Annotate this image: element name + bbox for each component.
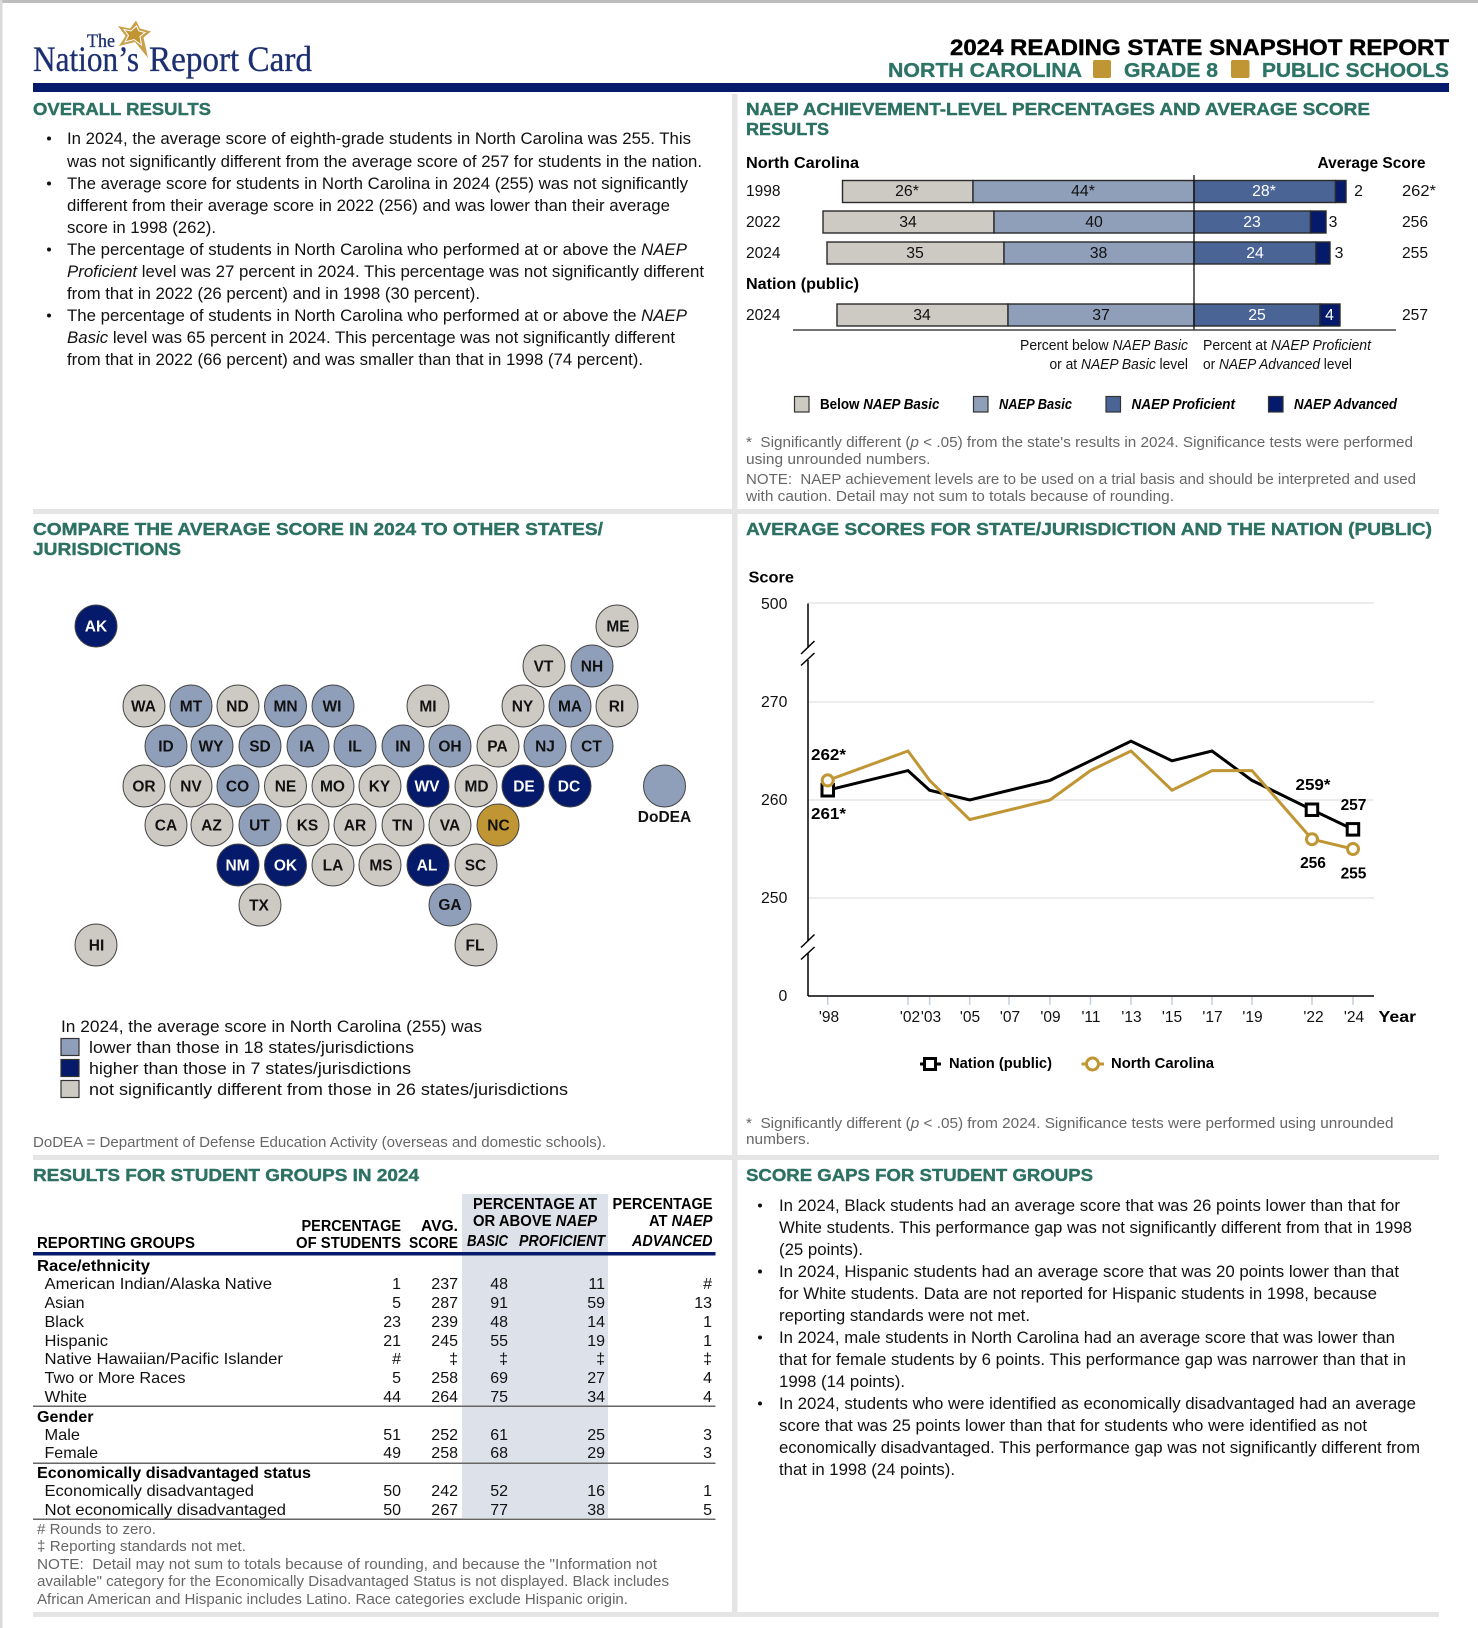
footnotes: student groups: African American and Hispanic includes Latino. Race categories exclude Hispanic origin. — [37, 1592, 628, 1608]
chart: state bubble map: OH — [438, 738, 462, 756]
heading: compare states — [33, 519, 603, 559]
group: gender: Female — [44, 1445, 98, 1462]
text block: overall results bullets: Proficient level was 27 percent in 2024. This percentage was not significantly different — [67, 263, 704, 281]
group: race/ethnicity: 34 — [587, 1389, 605, 1406]
chart: state bubble map: MD — [464, 778, 489, 796]
chart: state bubble map: LA — [323, 858, 343, 874]
text block: score gaps bullets: In 2024, Black students had an average score that was 26 points lower than that for — [779, 1197, 1401, 1215]
text block: score gaps bullets: that in 1998 (24 points). — [779, 1461, 955, 1479]
footnotes: achievement levels: using unrounded numbers. — [746, 452, 930, 468]
group: economically disadvantaged status: Economically disadvantaged — [44, 1483, 254, 1500]
chart: state bubble map: NV — [180, 778, 202, 796]
group: gender: 25 — [587, 1427, 605, 1444]
logo: The Nation's Report Card: The — [87, 31, 115, 52]
legend: achievement levels: NAEP Proficient — [1132, 397, 1236, 413]
text block: overall results bullets: The percentage of students in North Carolina who performed at or above the NAEP — [67, 241, 687, 259]
group: race/ethnicity: 91 — [490, 1295, 508, 1312]
table header: PERCENTAGE AT — [473, 1196, 598, 1213]
text block: overall results bullets: The average score for students in North Carolina in 2024 (255) was not significantly — [67, 175, 689, 193]
logo: The Nation's Report Card — [33, 20, 312, 79]
x axis: '15 — [1162, 1009, 1182, 1026]
group: race/ethnicity — [37, 1258, 712, 1406]
bar: North Carolina 2024: 2024 — [746, 245, 781, 262]
group: race/ethnicity: 48 — [490, 1314, 508, 1331]
chart: state bubble map: UT — [249, 818, 270, 834]
group: gender: 3 — [703, 1445, 712, 1462]
group: gender: Male — [44, 1427, 80, 1444]
data labels: 261* — [811, 806, 847, 823]
footnotes: student groups: ‡ Reporting standards not met. — [37, 1539, 246, 1555]
text block: overall results bullets — [47, 130, 704, 369]
chart: state bubble map: MA — [558, 698, 582, 716]
group: race/ethnicity: 1 — [703, 1333, 712, 1350]
group: race/ethnicity: 1 — [703, 1314, 712, 1331]
bar: North Carolina 1998: 2 — [1354, 183, 1363, 200]
bar: Nation public 2024 — [746, 304, 1428, 326]
y axis: 500 — [761, 596, 788, 613]
chart: state bubble map: DoDEA — [638, 809, 691, 826]
group: race/ethnicity: 14 — [587, 1314, 605, 1331]
chart: stacked achievement-level bars: North Carolina — [746, 155, 859, 172]
x axis: '13 — [1121, 1009, 1142, 1026]
bar: North Carolina 2022 — [746, 211, 1428, 233]
chart: state bubble map: SD — [249, 738, 271, 756]
chart: state bubble map: TN — [392, 818, 413, 834]
report subtitle: state, grade, school type — [888, 59, 1449, 82]
chart: state bubble map: MT — [180, 698, 203, 716]
group: economically disadvantaged status — [37, 1465, 712, 1519]
x axis: '98 — [819, 1009, 839, 1026]
chart: state bubble map: CT — [581, 738, 602, 756]
group: race/ethnicity: 48 — [490, 1276, 508, 1293]
heading: achievement levels: RESULTS — [746, 119, 829, 139]
bar: Nation public 2024: 257 — [1402, 307, 1428, 324]
legend: state comparison: In 2024, the average score in North Carolina (255) was — [61, 1017, 482, 1036]
chart: state bubble map: DC — [558, 778, 580, 796]
group: race/ethnicity: 69 — [490, 1370, 508, 1387]
table header: PERCENTAGE — [612, 1196, 712, 1213]
report subtitle: state, grade, school type: GRADE 8 — [1124, 59, 1218, 82]
footnote: trend significance — [746, 1116, 1394, 1148]
chart: state bubble map: NE — [275, 778, 296, 796]
chart: state bubble map: WI — [323, 698, 341, 716]
x axis: '24 — [1344, 1009, 1364, 1026]
group: race/ethnicity: ‡ — [596, 1351, 605, 1368]
legend: state comparison: higher than those in 7 states/jurisdictions — [89, 1059, 411, 1078]
group: race/ethnicity: 239 — [431, 1314, 458, 1331]
chart: state bubble map: AZ — [201, 818, 222, 834]
group: race/ethnicity: 59 — [587, 1295, 605, 1312]
chart: state bubble map: GA — [438, 897, 462, 914]
y axis: 250 — [761, 890, 788, 907]
table header: PROFICIENT — [519, 1233, 607, 1250]
chart: state bubble map: ME — [606, 618, 630, 636]
group: race/ethnicity: 258 — [431, 1370, 458, 1387]
group: gender: 51 — [383, 1427, 401, 1444]
group: economically disadvantaged status: 38 — [587, 1502, 605, 1519]
x axis: '11 — [1081, 1009, 1101, 1026]
bar: North Carolina 2024: 255 — [1402, 245, 1428, 262]
text block: score gaps bullets: for White students. Data are not reported for Hispanic students in 1998, because — [779, 1285, 1377, 1303]
group: economically disadvantaged status: 77 — [490, 1502, 508, 1519]
bar: North Carolina 1998: 1998 — [746, 183, 781, 200]
footnotes: student groups: NOTE: Detail may not sum to totals because of rounding, and because the "Information not — [37, 1557, 657, 1573]
y axis: 0 — [778, 988, 788, 1005]
heading: compare states: JURISDICTIONS — [33, 539, 181, 559]
footnotes: student groups — [37, 1522, 669, 1608]
chart: stacked achievement-level bars: Average Score — [1318, 155, 1426, 172]
bar: North Carolina 2024: 35 — [906, 245, 924, 262]
chart: state bubble map: CO — [226, 778, 249, 796]
group: economically disadvantaged status: 52 — [490, 1483, 508, 1500]
report title: 2024 READING STATE SNAPSHOT REPORT — [950, 35, 1450, 60]
group: race/ethnicity: Native Hawaiian/Pacific Islander — [44, 1351, 283, 1368]
axis captions: or NAEP Advanced level — [1203, 357, 1352, 373]
chart: state bubble map: MI — [419, 698, 437, 716]
legend: state comparison — [61, 1017, 568, 1099]
panel: achievement-level percentages — [745, 99, 1436, 505]
group: race/ethnicity: 21 — [383, 1333, 401, 1350]
bar: Nation public 2024: 2024 — [746, 307, 781, 324]
chart: state bubble map: HI — [89, 938, 104, 954]
group: race/ethnicity: ‡ — [499, 1351, 508, 1368]
bar: North Carolina 1998: 44* — [1071, 183, 1095, 200]
text block: score gaps bullets: White students. This performance gap was not significantly different from that in 1998 — [779, 1219, 1412, 1237]
table header: BASIC — [467, 1233, 509, 1250]
chart: state bubble map: MS — [369, 858, 393, 874]
bar: North Carolina 2024: 3 — [1335, 245, 1344, 262]
chart: state bubble map: ID — [158, 738, 174, 756]
group: race/ethnicity: 55 — [490, 1333, 508, 1350]
panel: score gaps — [746, 1165, 1420, 1479]
group: race/ethnicity: Black — [44, 1314, 84, 1331]
group: economically disadvantaged status: 5 — [703, 1502, 712, 1519]
report subtitle: state, grade, school type: NORTH CAROLINA — [888, 59, 1082, 82]
group: race/ethnicity: Hispanic — [44, 1333, 108, 1350]
heading: student groups: RESULTS FOR STUDENT GROUPS IN 2024 — [33, 1165, 419, 1185]
chart: stacked achievement-level bars — [746, 155, 1436, 330]
bar: Nation public 2024: 4 — [1325, 307, 1334, 324]
group: race/ethnicity: 23 — [383, 1314, 401, 1331]
group: race/ethnicity: ‡ — [703, 1351, 712, 1368]
x axis: '05 — [960, 1009, 980, 1026]
chart: state bubble map: RI — [609, 698, 624, 716]
chart: state bubble map: WV — [415, 778, 440, 796]
chart: state bubble map: DE — [513, 778, 535, 796]
text block: overall results bullets: In 2024, the average score of eighth-grade students in North Carolina was 255. This — [67, 130, 691, 148]
x axis — [808, 996, 1416, 1026]
axis captions — [1020, 338, 1372, 373]
group: race/ethnicity: Asian — [44, 1295, 84, 1312]
table header: ADVANCED — [631, 1233, 712, 1250]
group: economically disadvantaged status: 242 — [431, 1483, 458, 1500]
chart: stacked achievement-level bars: Nation (public) — [746, 276, 859, 293]
legend: trend lines: Nation (public) — [949, 1056, 1052, 1072]
chart: state bubble map: CA — [155, 818, 177, 834]
legend: achievement levels: NAEP Basic — [999, 397, 1072, 413]
axis captions: Percent at NAEP Proficient — [1203, 338, 1372, 354]
line: Nation (public) — [822, 741, 1359, 835]
group: gender: 258 — [431, 1445, 458, 1462]
group: race/ethnicity: 5 — [392, 1295, 401, 1312]
group: gender: 29 — [587, 1445, 605, 1462]
heading: score gaps: SCORE GAPS FOR STUDENT GROUPS — [746, 1165, 1093, 1185]
data labels: 259* — [1296, 777, 1332, 794]
heading: achievement levels: NAEP ACHIEVEMENT-LEVEL PERCENTAGES AND AVERAGE SCORE — [746, 99, 1370, 119]
bar: North Carolina 2024 — [746, 242, 1428, 264]
data labels: 257 — [1341, 797, 1366, 814]
group: economically disadvantaged status: 267 — [431, 1502, 458, 1519]
chart: state bubble map: FL — [466, 938, 484, 954]
group: race/ethnicity: 44 — [383, 1389, 401, 1406]
group: race/ethnicity: 287 — [431, 1295, 458, 1312]
text block: score gaps bullets — [758, 1197, 1420, 1479]
bar: North Carolina 2022: 40 — [1085, 214, 1103, 231]
group: race/ethnicity: 27 — [587, 1370, 605, 1387]
axis captions: or at NAEP Basic level — [1050, 357, 1188, 373]
logo: The Nation's Report Card: Report Card — [149, 39, 312, 79]
chart: state bubble map: IA — [299, 738, 315, 756]
table header — [37, 1196, 713, 1252]
text block: score gaps bullets: economically disadvantaged. This performance gap was not significantly different from — [779, 1439, 1420, 1457]
group: economically disadvantaged status: 16 — [587, 1483, 605, 1500]
group: gender: 49 — [383, 1445, 401, 1462]
footnotes: achievement levels: with caution. Detail may not sum to totals because of rounding. — [745, 489, 1174, 505]
table: student group results — [33, 1194, 716, 1520]
data labels: 256 — [1300, 855, 1326, 872]
text block: overall results bullets: The percentage of students in North Carolina who performed at or above the NAEP — [67, 307, 687, 325]
chart: state bubble map: OK — [274, 858, 298, 874]
legend: trend lines: North Carolina — [1111, 1056, 1215, 1072]
text block: score gaps bullets: (25 points). — [779, 1241, 863, 1259]
bar: North Carolina 2022: 3 — [1329, 214, 1338, 231]
chart: state bubble map: NY — [512, 698, 534, 716]
chart: state bubble map: VA — [440, 818, 460, 834]
x axis: Year — [1378, 1009, 1416, 1026]
legend: state comparison: lower than those in 18 states/jurisdictions — [89, 1038, 414, 1057]
legend: state comparison: not significantly different from those in 26 states/jurisdictions — [89, 1080, 568, 1099]
chart: state bubble map: ND — [226, 698, 249, 716]
table header: OF STUDENTS — [296, 1235, 401, 1252]
group: gender: 61 — [490, 1427, 508, 1444]
x axis: '02 — [900, 1009, 920, 1026]
group: race/ethnicity: 1 — [392, 1276, 401, 1293]
bar: North Carolina 2022: 2022 — [746, 214, 780, 231]
group: race/ethnicity: American Indian/Alaska Native — [44, 1276, 272, 1293]
footnotes: achievement levels: NOTE: NAEP achievement levels are to be used on a trial basis and should be interpreted and used — [746, 472, 1416, 488]
group: race/ethnicity: # — [703, 1276, 712, 1293]
group: race/ethnicity: Two or More Races — [44, 1370, 186, 1387]
bar: North Carolina 2022: 34 — [899, 214, 917, 231]
table header: OR ABOVE NAEP — [473, 1213, 598, 1230]
group: race/ethnicity: 264 — [431, 1389, 458, 1406]
chart: state bubble map: SC — [465, 858, 486, 874]
table header: AT NAEP — [649, 1213, 713, 1230]
bar: North Carolina 1998: 28* — [1252, 183, 1276, 200]
text block: score gaps bullets: In 2024, Hispanic students had an average score that was 20 points lower than that — [779, 1263, 1399, 1281]
chart: score trend line chart: Score — [748, 570, 794, 586]
group: economically disadvantaged status: Economically disadvantaged status — [37, 1465, 311, 1482]
chart: state bubble map: TX — [249, 898, 270, 914]
y axis: 270 — [761, 694, 788, 711]
table header: SCORE — [409, 1235, 458, 1252]
chart: state bubble map: AR — [344, 818, 366, 834]
footnote: trend significance: * Significantly different ( p < .05) from 2024. Significance tests were performed using unrounded — [746, 1116, 1394, 1132]
chart: state bubble map: MO — [320, 778, 345, 796]
legend: achievement levels: NAEP Advanced — [1294, 397, 1398, 413]
text block: overall results bullets: was not significantly different from the average score of 257 for students in the nation. — [66, 153, 702, 171]
group: race/ethnicity: 245 — [431, 1333, 458, 1350]
y axis — [761, 596, 814, 1005]
footnotes: achievement levels — [745, 435, 1416, 505]
panel: average scores trend — [746, 519, 1432, 1148]
logo: The Nation's Report Card: Nation’s — [33, 39, 139, 79]
legend: achievement levels: Below NAEP Basic — [820, 397, 940, 413]
chart: state bubble map: NH — [581, 658, 603, 676]
text block: score gaps bullets: In 2024, male students in North Carolina had an average score that was lower than — [779, 1329, 1395, 1347]
group: race/ethnicity: 11 — [588, 1276, 605, 1293]
footnotes: achievement levels: * Significantly different ( p < .05) from the state's results in 2024. Significance tests were performed — [746, 435, 1413, 451]
y axis: 260 — [761, 792, 788, 809]
x axis: '03 — [921, 1009, 941, 1026]
x axis: '22 — [1303, 1009, 1324, 1026]
text block: score gaps bullets: 1998 (14 points). — [779, 1373, 905, 1391]
text block: overall results bullets: different from their average score in 2022 (256) and was lower than their average — [67, 197, 670, 215]
header — [33, 20, 1450, 92]
table header: PERCENTAGE — [302, 1218, 401, 1235]
chart: state bubble map: NC — [487, 818, 510, 834]
chart: state bubble map: MN — [273, 698, 298, 716]
group: race/ethnicity: 4 — [703, 1370, 712, 1387]
group: economically disadvantaged status: 50 — [383, 1483, 401, 1500]
group: gender: 3 — [703, 1427, 712, 1444]
group: gender — [37, 1409, 712, 1462]
bar: Nation public 2024: 25 — [1248, 307, 1266, 324]
data labels: 255 — [1341, 866, 1367, 882]
chart: state bubble map — [75, 605, 691, 966]
x axis: '09 — [1040, 1009, 1061, 1026]
text block: score gaps bullets: score that was 25 points lower than that for students who were identified as not — [779, 1417, 1367, 1435]
footnote: trend significance: numbers. — [746, 1132, 810, 1148]
bar: North Carolina 2022: 256 — [1402, 214, 1428, 231]
text block: score gaps bullets: In 2024, students who were identified as economically disadvantaged had an average — [779, 1395, 1416, 1413]
data labels — [811, 747, 1367, 882]
bar: North Carolina 2024: 24 — [1246, 245, 1264, 262]
table header: REPORTING GROUPS — [37, 1235, 195, 1252]
group: gender: Gender — [37, 1409, 94, 1426]
chart: state bubble map: WA — [131, 698, 156, 716]
text block: overall results bullets: from that in 2022 (66 percent) and was smaller than that in 1998 (74 percent). — [67, 351, 643, 369]
chart: state bubble map: NM — [225, 858, 250, 874]
panel: compare to other states — [33, 519, 691, 1151]
legend: trend lines — [920, 1056, 1215, 1072]
chart: state bubble map: AK — [85, 618, 108, 636]
group: race/ethnicity: # — [392, 1351, 401, 1368]
chart: state bubble map: IL — [348, 738, 362, 756]
bar: North Carolina 2022: 23 — [1243, 214, 1261, 231]
chart: state bubble map: PA — [487, 738, 508, 756]
x axis: '17 — [1202, 1009, 1223, 1026]
heading: achievement levels — [746, 99, 1370, 139]
x axis: '19 — [1242, 1009, 1263, 1026]
chart: score trend line chart — [748, 570, 1416, 1026]
chart: state bubble map: OR — [132, 778, 156, 796]
group: race/ethnicity: 237 — [431, 1276, 458, 1293]
footnotes: student groups: available" category for the Economically Disadvantaged Status is not displayed. Black includes — [37, 1574, 669, 1590]
group: race/ethnicity: 5 — [392, 1370, 401, 1387]
text block: score gaps bullets: reporting standards were not met. — [779, 1307, 1030, 1325]
bar: North Carolina 1998: 26* — [895, 183, 919, 200]
text block: score gaps bullets: that for female students by 6 points. This performance gap was narrower than that in — [779, 1351, 1406, 1369]
text block: overall results bullets: Basic level was 65 percent in 2024. This percentage was not significantly different — [67, 329, 675, 347]
legend: achievement levels — [794, 396, 1398, 413]
group: race/ethnicity: 19 — [587, 1333, 605, 1350]
chart: state bubble map: AL — [417, 858, 437, 874]
heading: compare states: COMPARE THE AVERAGE SCORE IN 2024 TO OTHER STATES/ — [33, 519, 603, 539]
text block: overall results bullets: from that in 2022 (26 percent) and in 1998 (30 percent). — [67, 285, 480, 303]
chart: state bubble map: IN — [395, 738, 411, 756]
bar: North Carolina 1998: 262* — [1402, 183, 1436, 200]
group: race/ethnicity: Race/ethnicity — [37, 1258, 150, 1275]
panel: results for student groups — [33, 1165, 716, 1608]
panel: overall results — [33, 99, 704, 369]
bar: Nation public 2024: 37 — [1092, 307, 1110, 324]
group: gender: 252 — [431, 1427, 458, 1444]
footnote: DoDEA: DoDEA = Department of Defense Education Activity (overseas and domestic schools). — [33, 1135, 606, 1151]
group: economically disadvantaged status: Not economically disadvantaged — [44, 1502, 286, 1519]
bar: Nation public 2024: 34 — [913, 307, 931, 324]
chart: state bubble map: NJ — [535, 738, 555, 756]
chart: state bubble map: WY — [199, 738, 224, 756]
bar: North Carolina 1998 — [746, 180, 1436, 202]
line: North Carolina — [822, 751, 1358, 854]
chart: state bubble map: KY — [369, 778, 391, 796]
group: race/ethnicity: ‡ — [449, 1351, 458, 1368]
chart: state bubble map: KS — [297, 818, 318, 834]
grid lines — [808, 603, 1374, 898]
group: race/ethnicity: White — [44, 1389, 87, 1406]
table header: AVG. — [421, 1218, 458, 1235]
data labels: 262* — [811, 747, 847, 764]
group: race/ethnicity: 75 — [490, 1389, 508, 1406]
bar: North Carolina 2024: 38 — [1090, 245, 1107, 262]
group: race/ethnicity: 4 — [703, 1389, 712, 1406]
footnotes: student groups: # Rounds to zero. — [37, 1522, 156, 1538]
group: race/ethnicity: 13 — [694, 1295, 712, 1312]
chart: state bubble map: VT — [534, 658, 554, 676]
group: economically disadvantaged status: 1 — [703, 1483, 712, 1500]
group: economically disadvantaged status: 50 — [383, 1502, 401, 1519]
icon: gold star — [118, 20, 151, 58]
text block: overall results bullets: score in 1998 (262). — [67, 219, 216, 237]
heading: average scores: AVERAGE SCORES FOR STATE/JURISDICTION AND THE NATION (PUBLIC) — [746, 519, 1432, 539]
axis captions: Percent below NAEP Basic — [1020, 338, 1189, 354]
x axis: '07 — [1000, 1009, 1020, 1026]
heading: overall results: OVERALL RESULTS — [33, 99, 211, 119]
group: gender: 68 — [490, 1445, 508, 1462]
report subtitle: state, grade, school type: PUBLIC SCHOOLS — [1262, 59, 1449, 82]
